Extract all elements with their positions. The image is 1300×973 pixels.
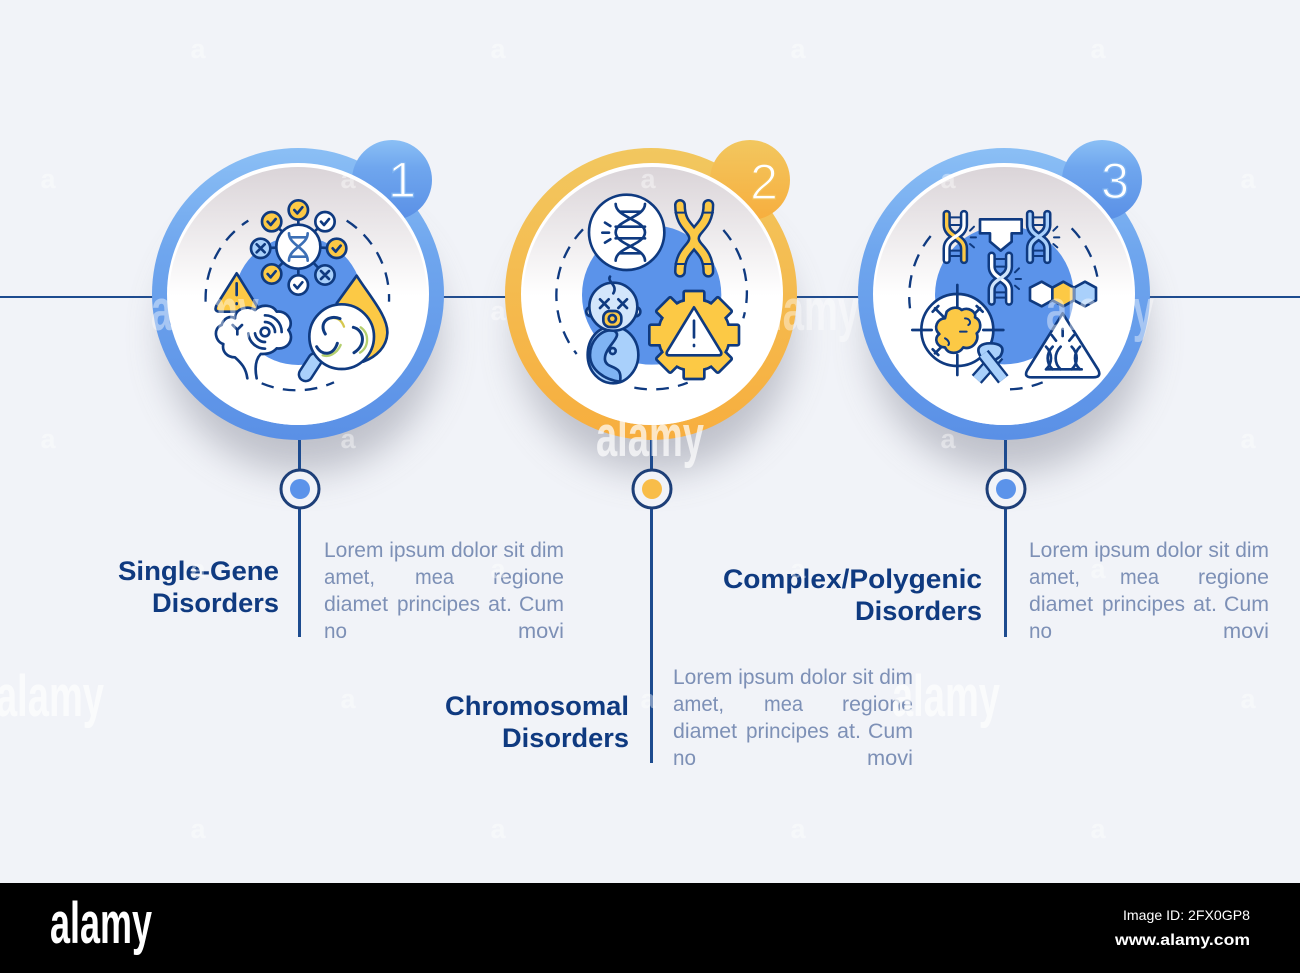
text block 1: amet, <box>324 566 375 589</box>
ring 1 <box>152 148 444 440</box>
icon: chromosomal disorders <box>556 195 747 389</box>
text block 2: amet, <box>673 693 724 716</box>
dashed orbit 3 <box>909 228 1097 389</box>
badge 1: 1 <box>388 152 416 208</box>
brain <box>216 306 291 378</box>
text block 2: diamet <box>673 720 737 743</box>
chromosome X <box>675 205 713 272</box>
dashed orbit 1 <box>206 221 389 390</box>
watermark overlay: a <box>790 34 806 64</box>
heading: chromosomal disorders: Disorders <box>502 723 629 753</box>
helix center <box>992 256 1021 302</box>
text block 3 <box>1029 539 1269 643</box>
badge 2 <box>710 140 790 220</box>
badge 2: 2 <box>750 154 778 210</box>
watermark overlay: alamy <box>151 278 259 343</box>
watermark overlay: alamy <box>596 404 704 469</box>
heading: chromosomal disorders <box>445 691 629 753</box>
panel: step 3 circle <box>858 140 1150 473</box>
watermark overlay: a <box>640 684 656 714</box>
horizontal timeline line <box>0 296 1300 298</box>
site address: www.alamy.com <box>1114 932 1250 949</box>
watermark overlay: a <box>790 554 806 584</box>
text block 1: regione <box>493 566 564 589</box>
watermark overlay: a <box>490 296 506 326</box>
text block 2: Cum <box>868 720 913 743</box>
text block 2: regione <box>842 693 913 716</box>
text block 1: movi <box>518 620 564 643</box>
timeline stem and marker 1 <box>281 440 319 637</box>
footer bar <box>0 883 1300 973</box>
blue blob 3 <box>935 226 1074 364</box>
ring 2 <box>505 148 797 440</box>
watermark overlay: a <box>340 684 356 714</box>
helix blue right <box>1030 214 1059 260</box>
heading: complex/polygenic disorders: Complex/Polygenic <box>723 564 982 594</box>
dashed orbit 2 <box>556 229 747 389</box>
text block 3: no <box>1029 620 1052 643</box>
heading: chromosomal disorders: Chromosomal <box>445 691 629 721</box>
watermark overlay: a <box>790 814 806 844</box>
hexagons <box>1030 282 1096 306</box>
ring 3 <box>858 148 1150 440</box>
text block 3: amet, <box>1029 566 1080 589</box>
watermark overlay: a <box>340 164 356 194</box>
watermark overlay: alamy <box>0 664 104 729</box>
timeline stem and marker 2 <box>633 440 671 763</box>
shadow 2 <box>517 197 793 473</box>
panel: step 2 circle <box>505 140 797 473</box>
panel: step 1 circle <box>152 140 444 473</box>
watermark overlay: a <box>190 34 206 64</box>
timeline stem and marker 3 <box>987 440 1025 637</box>
heading: single-gene disorders: Single-Gene <box>118 556 279 586</box>
badge 1 <box>352 140 432 220</box>
text block 2: movi <box>867 747 913 770</box>
text block 2: Lorem ipsum dolor sit dim <box>673 666 913 689</box>
text block 3: movi <box>1223 620 1269 643</box>
arrow down <box>980 219 1022 251</box>
watermark overlay: alamy <box>892 664 1000 729</box>
watermark overlay: a <box>1240 684 1256 714</box>
icon: polygenic disorders <box>909 214 1099 389</box>
text block 2: mea <box>764 693 803 716</box>
watermark overlay: a <box>1090 34 1106 64</box>
watermark overlay: a <box>190 554 206 584</box>
DNA circle <box>589 195 664 270</box>
gene mutation network <box>251 200 346 295</box>
awareness ribbon <box>977 343 1003 379</box>
watermark overlay: a <box>490 34 506 64</box>
text block 2: no <box>673 747 696 770</box>
text block 3: principes <box>1102 593 1185 616</box>
inner disc 3 <box>873 163 1135 425</box>
text block 3: regione <box>1198 566 1269 589</box>
shadow 3 <box>870 197 1146 473</box>
shadow 1 <box>164 197 440 473</box>
magnifier with sickle cells <box>306 304 374 374</box>
text block 1: mea <box>415 566 454 589</box>
target with tumour <box>912 285 1003 375</box>
watermark overlay: a <box>40 424 56 454</box>
text block 1: Cum <box>519 593 564 616</box>
watermark overlay: a <box>940 424 956 454</box>
blue blob 2 <box>582 225 721 365</box>
heading: single-gene disorders: Disorders <box>152 588 279 618</box>
text block 1: Lorem ipsum dolor sit dim <box>324 539 564 562</box>
blue blob 1 <box>234 236 363 365</box>
text block 2: principes <box>746 720 829 743</box>
warning gear <box>649 291 739 379</box>
baby <box>586 277 640 383</box>
text block 1: no <box>324 620 347 643</box>
watermark overlay: a <box>1240 164 1256 194</box>
text block 3: diamet <box>1029 593 1093 616</box>
icon: single-gene disorders <box>206 200 389 390</box>
image id: Image ID: 2FX0GP8 <box>1123 907 1250 923</box>
blood drop <box>337 276 387 362</box>
text block 2: at. <box>837 720 861 743</box>
watermark overlay: a <box>640 164 656 194</box>
text block 3: Lorem ipsum dolor sit dim <box>1029 539 1269 562</box>
text block 2 <box>673 666 913 770</box>
watermark overlay: a <box>190 814 206 844</box>
heading: single-gene disorders <box>118 556 279 618</box>
warning triangle <box>216 273 258 312</box>
footer logo: alamy <box>50 891 152 956</box>
text block 3: at. <box>1193 593 1217 616</box>
text block 1: at. <box>488 593 512 616</box>
inner disc 2 <box>521 163 783 425</box>
text block 3: mea <box>1120 566 1159 589</box>
watermark overlay: a <box>1240 424 1256 454</box>
text block 1 <box>324 539 564 643</box>
watermark overlay: a <box>940 164 956 194</box>
helix yellow <box>947 214 976 260</box>
watermark overlay: a <box>490 554 506 584</box>
watermark overlay: a <box>490 814 506 844</box>
badge 3 <box>1062 140 1142 220</box>
text block 1: diamet <box>324 593 388 616</box>
badge 3: 3 <box>1101 153 1129 209</box>
warning triangle with DNA <box>1026 313 1099 377</box>
heading: complex/polygenic disorders <box>723 564 982 626</box>
watermark overlay: a <box>340 424 356 454</box>
watermark overlay: alamy <box>1046 278 1154 343</box>
heading: complex/polygenic disorders: Disorders <box>855 596 982 626</box>
watermark overlay: alamy <box>751 278 859 343</box>
text block 3: Cum <box>1224 593 1269 616</box>
text block 1: principes <box>397 593 480 616</box>
watermark overlay: a <box>1090 554 1106 584</box>
watermark overlay: a <box>40 164 56 194</box>
inner disc 1 <box>167 163 429 425</box>
watermark overlay: a <box>1090 814 1106 844</box>
